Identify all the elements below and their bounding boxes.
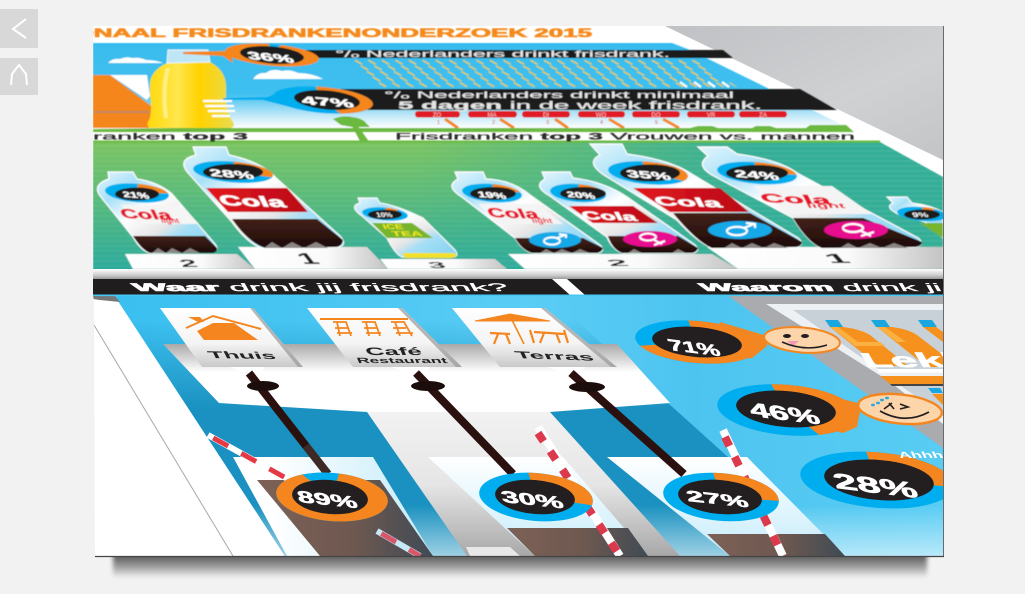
badge: 27 percent: 27% <box>684 488 751 511</box>
glass: thuis <box>233 457 433 556</box>
orange bottles <box>830 327 943 367</box>
icon: parasol and tables <box>475 314 568 344</box>
bottle: ice tea 10 percent: TEA <box>390 229 425 238</box>
panel: bottom blue field <box>93 295 943 556</box>
day labels: DO <box>652 113 661 119</box>
day counts: 3 <box>546 120 549 126</box>
drink <box>507 528 648 556</box>
podium left: 2 <box>177 258 201 269</box>
mountain line <box>93 111 150 113</box>
grey image panel corner <box>727 295 943 448</box>
icon: male symbol <box>544 234 566 245</box>
green strip <box>93 125 854 132</box>
tree <box>333 116 370 143</box>
bottle: ice tea 10 percent <box>354 198 457 258</box>
icon: female symbol <box>843 224 874 236</box>
Lekker label: Lekker <box>855 348 1020 372</box>
drink <box>257 480 433 556</box>
day counts: 4 <box>600 120 603 126</box>
stat: 36 percent drinks soda <box>182 42 734 68</box>
straw: terras <box>723 430 783 556</box>
bottle: cola light 24 percent women <box>698 147 922 248</box>
yellow people dot grid <box>353 60 737 87</box>
lower orange bottles <box>880 376 943 405</box>
bottle: ice tea 10 percent: 10% <box>375 212 394 219</box>
icon: female symbol <box>640 234 665 245</box>
title: NATIONAAL FRISDRANKENONDERZOEK 2015 <box>15 28 593 40</box>
day labels: ZO <box>433 113 441 119</box>
badge tail <box>222 94 290 106</box>
lower image panel <box>885 378 943 424</box>
day labels: ZA <box>759 113 767 119</box>
badge: 71 percent with happy face <box>633 316 841 368</box>
bottle: cola 20 percent women <box>540 172 698 253</box>
straw: thuis <box>208 435 420 556</box>
day counts: 2 <box>492 120 495 126</box>
sign post: cafe <box>392 367 513 474</box>
upper section: sky and rankings <box>15 28 948 270</box>
white mountain face <box>110 75 150 100</box>
bottle: ice tea 10 percent: ICE <box>381 222 405 231</box>
day labels: DI <box>543 113 549 119</box>
heading bar: waarom drink jij: Waarom drink ji <box>696 281 945 293</box>
heading: top 3 women vs men: Frisdranken top 3 Vrouwen vs. mannen <box>395 132 855 142</box>
frame drop shadow <box>113 553 927 577</box>
badge: 46 percent with sweating face: 46% <box>746 399 823 430</box>
bar line 1: °/ₒ Nederlanders drinkt minimaal <box>384 90 734 101</box>
badge: 89 percent: 89% <box>295 487 360 512</box>
heading bar: waarom drink jij <box>567 279 945 295</box>
bar label: °/ₒ Nederlanders drinkt frisdrank. <box>335 49 670 59</box>
icon: house <box>186 316 261 340</box>
icon: yellow bottle <box>148 50 235 128</box>
podium right: 2 <box>604 258 632 268</box>
sign: terras <box>452 308 617 367</box>
badge 47: 47% <box>300 95 356 111</box>
day counts <box>437 120 658 124</box>
bottle: cola 35 percent men: 35% <box>625 168 674 183</box>
badge 36: 36% <box>246 50 296 66</box>
day labels: WO <box>596 113 606 119</box>
bottle: cola 35 percent men: Cola <box>651 194 726 210</box>
badge: 89 percent <box>274 468 390 526</box>
badge: 28 percent <box>798 446 956 514</box>
glass: cafe <box>428 457 648 556</box>
bottle: cola 35 percent men <box>590 144 802 248</box>
lower grey table <box>367 412 680 556</box>
badge: 30 percent: 30% <box>499 487 566 513</box>
bottle: cola 20 percent women: 20% <box>565 189 598 201</box>
bottle: cola light 21 percent <box>97 172 217 253</box>
badge: 28 percent: 28% <box>830 468 922 503</box>
icon: face <box>857 390 943 428</box>
podium right: 1 <box>820 252 855 266</box>
bottle: cola light 19 percent men: 19% <box>476 189 509 201</box>
drink <box>707 534 845 556</box>
panel: rankings <box>93 140 948 270</box>
bottle: ice tea 9 percent: 9% <box>911 212 930 219</box>
day pills <box>415 111 787 118</box>
badge: 46 percent with sweating face <box>715 379 943 441</box>
bottle: cola 28 percent: Cola <box>216 193 290 211</box>
sign post: thuis <box>230 367 328 474</box>
bar <box>305 50 733 58</box>
home button <box>0 58 38 95</box>
podium left <box>125 247 507 270</box>
week day row <box>93 111 854 132</box>
orange mountain <box>93 74 152 129</box>
cloud right <box>253 70 323 79</box>
badge: 27 percent <box>661 468 781 526</box>
bottle: cola light 24 percent women: Cola <box>757 191 835 207</box>
panel: reasons image <box>766 304 1020 424</box>
icon: cafe chairs <box>320 319 413 336</box>
sign: thuis: Thuis <box>206 350 278 362</box>
podium shelf band <box>93 269 943 279</box>
cloud left <box>108 57 163 63</box>
blue caps <box>825 320 943 393</box>
bottle: cola light 24 percent women: light <box>805 201 848 210</box>
sign: cafe restaurant: Restaurant <box>355 356 449 365</box>
bar <box>330 89 837 110</box>
podium left: 1 <box>292 250 324 268</box>
bottle: cola light 19 percent men: Cola <box>484 205 542 222</box>
frame edge <box>95 26 944 556</box>
day labels: VR <box>707 113 716 119</box>
heading: soft drinks top 3: ranken top 3 <box>93 132 248 142</box>
bottle: cola 28 percent: 28% <box>208 167 257 182</box>
lighter bottle stripes <box>830 327 906 346</box>
sign: terras: Terras <box>513 350 596 363</box>
badge: 30 percent <box>477 468 595 526</box>
Ahhh label: Ahhh! <box>896 450 951 461</box>
heading bar: waar drink jij frisdrank: Waar drink jij frisdrank? <box>129 281 511 293</box>
bottle: cola light 19 percent men: light <box>530 216 555 225</box>
day labels: MA <box>488 113 496 119</box>
sign crossbar <box>163 344 670 412</box>
tilted infographic frame <box>93 26 943 556</box>
grey backdrop corner <box>665 26 943 160</box>
icon: male symbol <box>727 223 755 235</box>
day counts: 1 <box>437 120 440 126</box>
bottle: cola light 24 percent women: 24% <box>733 168 782 183</box>
panel: sky <box>93 43 853 143</box>
orange day bars <box>445 119 679 128</box>
bottle: cola light 21 percent: light <box>159 216 182 225</box>
icon: face <box>763 324 841 356</box>
badge tail <box>182 50 234 64</box>
day counts: 5 <box>655 120 658 126</box>
bottle: cola light 21 percent: Cola <box>117 206 175 223</box>
sign: thuis <box>160 308 303 367</box>
bottle: cola 20 percent women: Cola <box>578 209 640 224</box>
sign: cafe restaurant: Café <box>363 345 425 358</box>
stat: 47 percent five days a week <box>222 86 838 114</box>
badge 47 <box>273 86 374 114</box>
bottle: cola light 19 percent men <box>452 172 603 253</box>
podium left: 3 <box>426 261 448 270</box>
day labels <box>433 113 767 119</box>
sign post: terras <box>547 367 684 474</box>
badge 36 <box>224 42 320 68</box>
heading bar: waar drink jij frisdrank <box>93 279 570 295</box>
bottle: cola light 21 percent: 21% <box>121 189 151 201</box>
bottle: ice tea 9 percent <box>887 197 948 238</box>
glass: terras <box>607 457 845 556</box>
bottle: cola 28 percent <box>184 147 344 248</box>
badge: 71 percent with happy face: 71% <box>665 336 723 360</box>
sign: cafe restaurant <box>307 308 462 367</box>
straw: cafe <box>538 427 620 556</box>
back button <box>0 9 38 48</box>
podium right <box>508 247 943 269</box>
bar line 2: 5 dagen in de week frisdrank. <box>398 100 762 112</box>
